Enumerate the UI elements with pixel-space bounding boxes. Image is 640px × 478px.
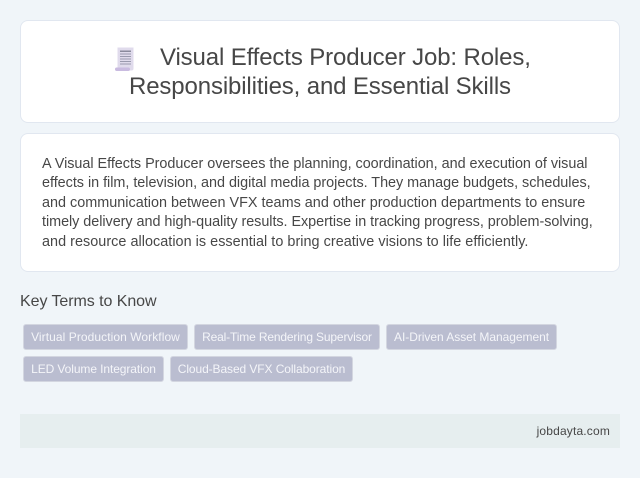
footer bar — [20, 414, 620, 448]
tag: cloud-based vfx collaboration: Cloud-Based VFX Collaboration — [178, 362, 345, 376]
tag: virtual production workflow: Virtual Production Workflow — [31, 330, 180, 344]
panel: description card — [20, 133, 620, 272]
tag list: key terms — [23, 324, 557, 382]
text block: description: A Visual Effects Producer oversees the planning, coordination, and execution of visual — [42, 156, 587, 172]
tag: real-time rendering supervisor — [194, 324, 380, 350]
text block: description: and communication between VFX teams and other production departments to ensure — [42, 194, 585, 210]
tag: led volume integration — [23, 356, 164, 382]
footer text: site name: jobdayta.com — [537, 424, 610, 438]
text block: description: effects in film, television, and digital media projects. They manage budgets, schedules, — [42, 175, 591, 191]
heading: key terms: Key Terms to Know — [20, 293, 157, 310]
heading: title — [129, 44, 531, 100]
tag: real-time rendering supervisor: Real-Time Rendering Supervisor — [202, 330, 372, 344]
text block: description: timely delivery and high-quality results. Expertise in tracking progress, problem-solving, — [42, 214, 593, 230]
tag: cloud-based vfx collaboration — [170, 356, 353, 382]
text block: description — [42, 156, 593, 250]
tag: virtual production workflow — [23, 324, 188, 350]
tag: ai-driven asset management: AI-Driven Asset Management — [394, 330, 549, 344]
panel: title card — [20, 20, 620, 123]
tag: led volume integration: LED Volume Integration — [31, 362, 156, 376]
icon: document scroll — [115, 48, 134, 71]
heading: title: Responsibilities, and Essential Skills — [129, 73, 511, 100]
text block: description: and resource allocation is essential to bring creative visions to life efficiently. — [42, 234, 528, 250]
tag: ai-driven asset management — [386, 324, 557, 350]
heading: title: Visual Effects Producer Job: Roles, — [160, 44, 531, 71]
